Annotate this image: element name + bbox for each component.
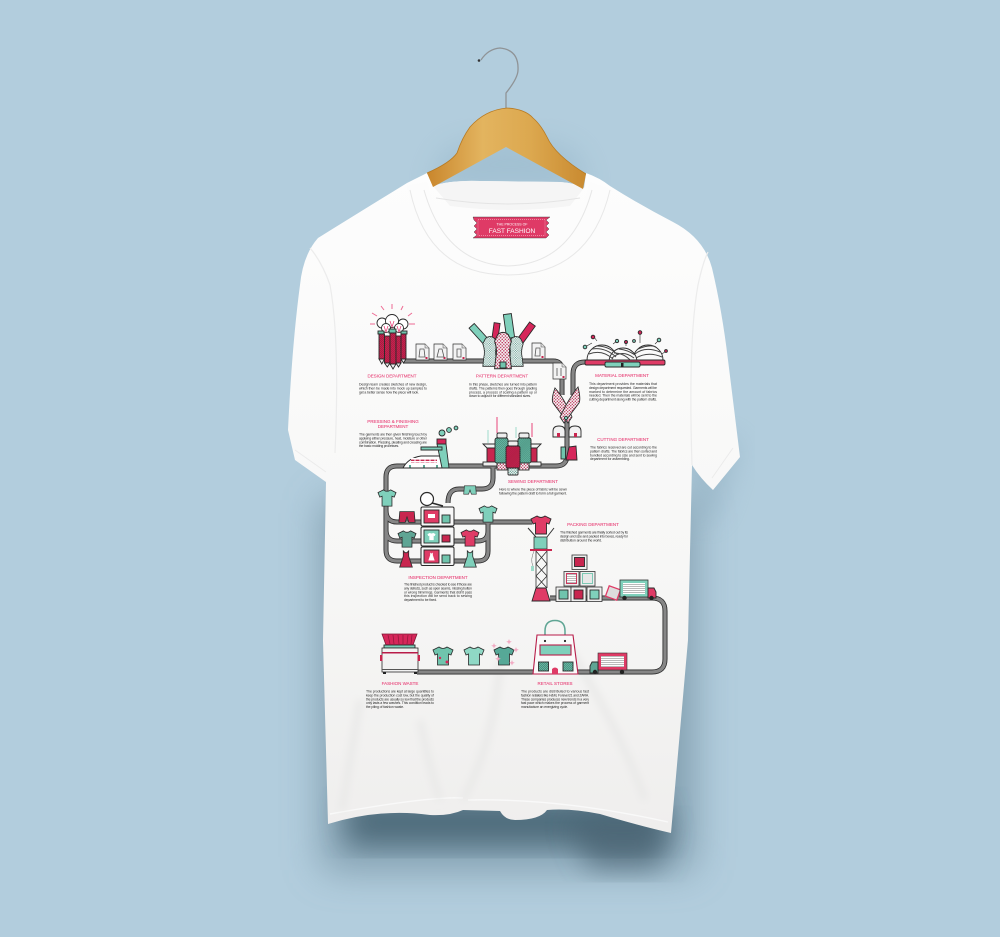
icon: fabric pieces	[561, 446, 577, 460]
text: pressing and finishing department: the basic molding processes.	[359, 444, 399, 448]
label: The process of fast fashion: THE PROCESS OF	[497, 222, 527, 226]
label: The process of fast fashion: FAST FASHION	[489, 228, 536, 235]
icon: delivery truck	[620, 580, 656, 600]
text: pattern department: down to adjust it for different standard sizes.	[469, 394, 531, 398]
icon: pattern papers	[416, 343, 566, 379]
text: packing department	[560, 522, 629, 542]
text: pattern department: PATTERN DEPARTMENT	[476, 374, 528, 378]
icon: retail truck	[590, 653, 627, 674]
text: design department: Design team creates sketches of new design,	[359, 382, 427, 386]
text: design department: get a better sense how the piece will look.	[359, 390, 419, 394]
text: sewing department: SEWING DEPARTMENT	[508, 479, 558, 484]
text: retail stores: RETAIL STORES	[538, 681, 572, 686]
text: cutting department: pattern drafts. The fabrics are then sorted and	[590, 449, 657, 453]
icon: steam iron	[403, 426, 458, 468]
text: pattern department: In this phase, sketches are turned into pattern	[469, 382, 537, 386]
text: inspection department: INSPECTION DEPARTMENT	[408, 575, 468, 580]
text: packing department: distribution around the world.	[560, 538, 602, 542]
text: fashion waste: FASHION WASTE	[382, 681, 418, 686]
icon: yarn balls and pins	[583, 331, 667, 367]
text: packing department: design and size and packed into boxes, ready for	[560, 534, 629, 538]
text: retail stores: These companies produces new trends in a very	[521, 697, 589, 701]
text: packing department: PACKING DEPARTMENT	[567, 522, 619, 527]
text: sewing department: following the pattern draft to form a full garment.	[499, 491, 567, 495]
text: inspection department: department to be fixed.	[404, 598, 437, 602]
text: material department: cutting department along with the pattern drafts.	[589, 398, 657, 402]
icon: hanger	[427, 48, 586, 189]
icon: shopping bag store	[533, 620, 578, 674]
text: pressing and finishing department: combination. Pressing, pleating and creasing are	[359, 440, 427, 444]
text: material department: design department requested. Garments will be	[589, 386, 657, 390]
text: pressing and finishing department: PRESSING & FINISHING	[367, 419, 419, 424]
text: cutting department	[590, 437, 657, 461]
icon: garments on the inspection line	[378, 486, 497, 567]
icon: scissors	[552, 387, 581, 437]
text: retail stores	[521, 681, 589, 709]
text: retail stores: fashion retailers like H&M, Forever21 and ZARA.	[521, 693, 589, 697]
shirt shadow	[322, 135, 740, 870]
text: retail stores: manufacture an energizing cycle.	[521, 705, 568, 709]
text: pressing and finishing department: applying either pressure, heat, moisture or other	[359, 436, 428, 440]
text: fashion waste	[366, 681, 434, 709]
text: pressing and finishing department: The garments are then given finishing touch by	[359, 432, 427, 436]
text: inspection department: The finished product is checked to see if those are	[404, 582, 472, 586]
text: cutting department: The fabrics received are cut according to the	[590, 446, 657, 450]
text: inspection department	[404, 575, 472, 602]
text: inspection department: or wrong trimmings. Garments that didn't pass	[404, 590, 472, 594]
text: fashion waste: only lasts a few washes. This condition leads to	[366, 701, 434, 705]
text: material department: MATERIAL DEPARTMENT	[595, 373, 649, 378]
text: fashion waste: The productions are kept at large quantities to	[366, 690, 434, 694]
text: material department: This department provides the materials that	[589, 382, 657, 386]
icon: inspection stations	[420, 492, 454, 566]
text: cutting department: department for assembling.	[590, 457, 630, 461]
text: fashion waste: the products are usually so low that the products	[366, 697, 434, 701]
text: sewing department	[499, 479, 567, 495]
text: material department: marked to determine the amount of fabrics	[589, 390, 657, 394]
text: retail stores: The products are distributed to various fast	[521, 690, 589, 694]
text: design department: which then be made into mock up samples to	[359, 386, 427, 390]
text: inspection department: this inspection will be send back to sewing	[404, 594, 472, 598]
text: retail stores: fast pace which makes the process of garment	[521, 701, 589, 705]
text: packing department: The finished garments are finally sorted out by its	[560, 530, 628, 534]
text: cutting department: CUTTING DEPARTMENT	[597, 437, 649, 442]
text: fashion waste: the piling of fashion waste.	[366, 705, 404, 709]
text: fashion waste: keep the production cost low, but the quality of	[366, 693, 434, 697]
text: pressing and finishing department: DEPARTMENT	[378, 424, 409, 429]
icon: stacked boxes	[556, 555, 621, 602]
icon: design pencils and bulbs	[370, 304, 415, 369]
text: cutting department: bundled according to size and sent to sewing	[590, 453, 657, 457]
text: pattern department	[469, 374, 538, 398]
icon: sewing machine spools	[483, 417, 541, 475]
icon: packing tower	[528, 516, 554, 601]
text: pressing and finishing department	[359, 419, 428, 448]
text: pattern department: process, a process of scaling a pattern up or	[469, 390, 538, 394]
text: material department	[589, 373, 657, 402]
icon: rulers and mannequins	[469, 314, 535, 369]
text: inspection department: any defects, such as open seams, missing button	[404, 586, 472, 590]
conveyor pipes	[386, 361, 665, 672]
text: design department	[359, 374, 427, 394]
text: design department: DESIGN DEPARTMENT	[367, 374, 417, 378]
t-shirt	[288, 173, 740, 833]
text: sewing department: Here is where the piece of fabric will be sewn	[499, 488, 567, 492]
label: The process of fast fashion	[473, 217, 550, 238]
text: material department: needed. Then the materials will be sent to the	[589, 394, 657, 398]
icon: worn shirts	[433, 639, 519, 666]
icon: dumpster	[380, 634, 420, 674]
text: pattern department: drafts. The patterns then goes through grading	[469, 386, 537, 390]
